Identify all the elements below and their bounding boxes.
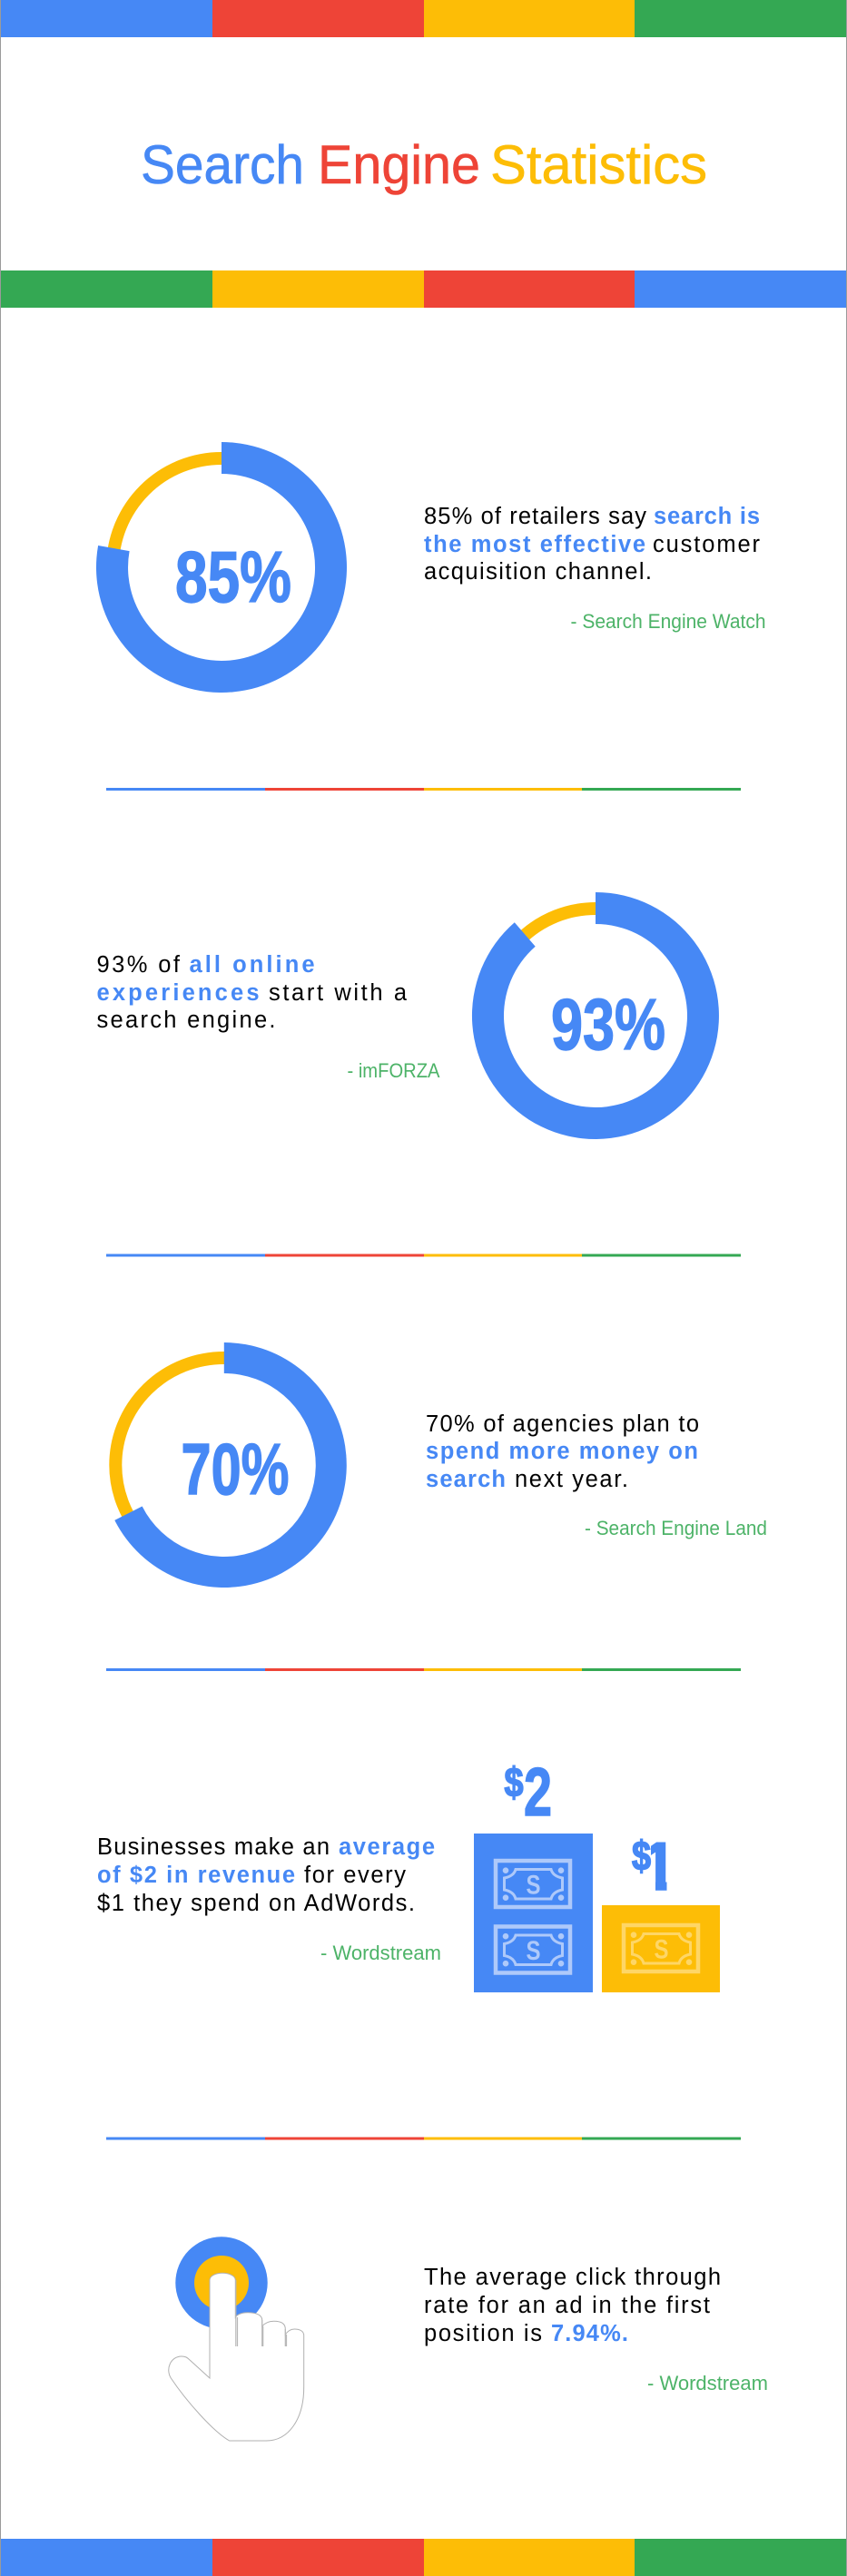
icon: dollar bill: S <box>654 1935 668 1964</box>
text block: 93% of online experiences: search engine. <box>96 1008 276 1033</box>
source: Wordstream: - Wordstream <box>320 1942 441 1964</box>
top colour bar <box>1 0 846 37</box>
divider 2 <box>106 1254 741 1256</box>
text block: average of $2 in revenue: Businesses make an <box>97 1834 330 1860</box>
donut chart: 93%: 93% <box>551 984 665 1065</box>
text block: 93% of online experiences: experiences <box>96 980 260 1006</box>
text block: click through rate <box>424 2265 721 2346</box>
donut chart: 70%: 70% <box>182 1429 289 1509</box>
divider 1 <box>106 788 741 791</box>
icon: dollar bill <box>496 1861 570 1907</box>
label: $1: 1 <box>641 1828 677 1904</box>
divider 3 <box>106 1668 741 1671</box>
label: $2: $ <box>505 1759 523 1805</box>
text block: 70% of agencies: next year. <box>515 1467 628 1492</box>
text block: average of $2 in revenue <box>97 1834 435 1916</box>
text block: 85% of retailers <box>424 504 761 585</box>
text block: 85% of retailers: search is <box>654 504 760 529</box>
text block: 70% of agencies: search <box>426 1467 506 1492</box>
second colour bar <box>1 270 846 308</box>
icon: hand clicking target <box>169 2237 304 2441</box>
source: Search Engine Land: - Search Engine Land <box>585 1517 767 1539</box>
divider 4 <box>106 2137 741 2140</box>
source: imFORZA: - imFORZA <box>347 1059 440 1082</box>
title <box>141 134 707 195</box>
text block: click through rate: rate for an ad in the first <box>424 2293 710 2318</box>
donut chart: 93% <box>472 892 719 1139</box>
text block: 93% of online experiences <box>96 952 408 1033</box>
label: $2: 2 <box>524 1754 552 1830</box>
label: $1 <box>632 1839 666 1891</box>
icon: dollar bill <box>496 1926 570 1973</box>
text block: average of $2 in revenue: average <box>339 1834 435 1860</box>
source: Search Engine Watch: - Search Engine Watch <box>570 610 766 633</box>
text block: click through rate: The average click through <box>424 2265 721 2290</box>
text block: average of $2 in revenue: for every <box>304 1863 406 1888</box>
text block: click through rate: position is <box>424 2321 542 2346</box>
text block: average of $2 in revenue: $1 they spend on AdWords. <box>97 1891 415 1916</box>
icon: dollar bill: S <box>527 1936 541 1966</box>
text block: 85% of retailers: 85% of retailers say <box>424 504 646 529</box>
text block: 85% of retailers: acquisition channel. <box>424 559 652 585</box>
text block: 85% of retailers: the most effective <box>424 532 645 557</box>
text block: 93% of online experiences: all online <box>189 952 314 978</box>
text block: average of $2 in revenue: of $2 in revenue <box>97 1863 295 1888</box>
donut chart: 85% <box>96 442 347 693</box>
title: Search <box>141 134 304 195</box>
text block: 85% of retailers: customer <box>653 532 761 557</box>
title: Engine <box>318 134 480 195</box>
bar: $1 spend <box>602 1905 720 1992</box>
title: Statistics <box>490 134 707 195</box>
text block: 93% of online experiences: start with a <box>269 980 408 1006</box>
bottom colour bar <box>1 2539 846 2576</box>
text block: 93% of online experiences: 93% of <box>96 952 181 978</box>
text block: 70% of agencies: spend more money on <box>426 1439 698 1464</box>
text block: 70% of agencies <box>426 1411 699 1492</box>
label: $2 <box>505 1754 552 1830</box>
donut chart: 70% <box>114 1342 347 1588</box>
bar: $2 revenue <box>474 1834 593 1992</box>
text block: 70% of agencies: 70% of agencies plan to <box>426 1411 699 1437</box>
source: Wordstream: - Wordstream <box>647 2372 768 2394</box>
donut chart: 85%: 85% <box>175 536 291 617</box>
text block: click through rate: 7.94%. <box>551 2321 628 2346</box>
icon: dollar bill: S <box>527 1870 541 1901</box>
label: $1: $ <box>632 1833 651 1879</box>
